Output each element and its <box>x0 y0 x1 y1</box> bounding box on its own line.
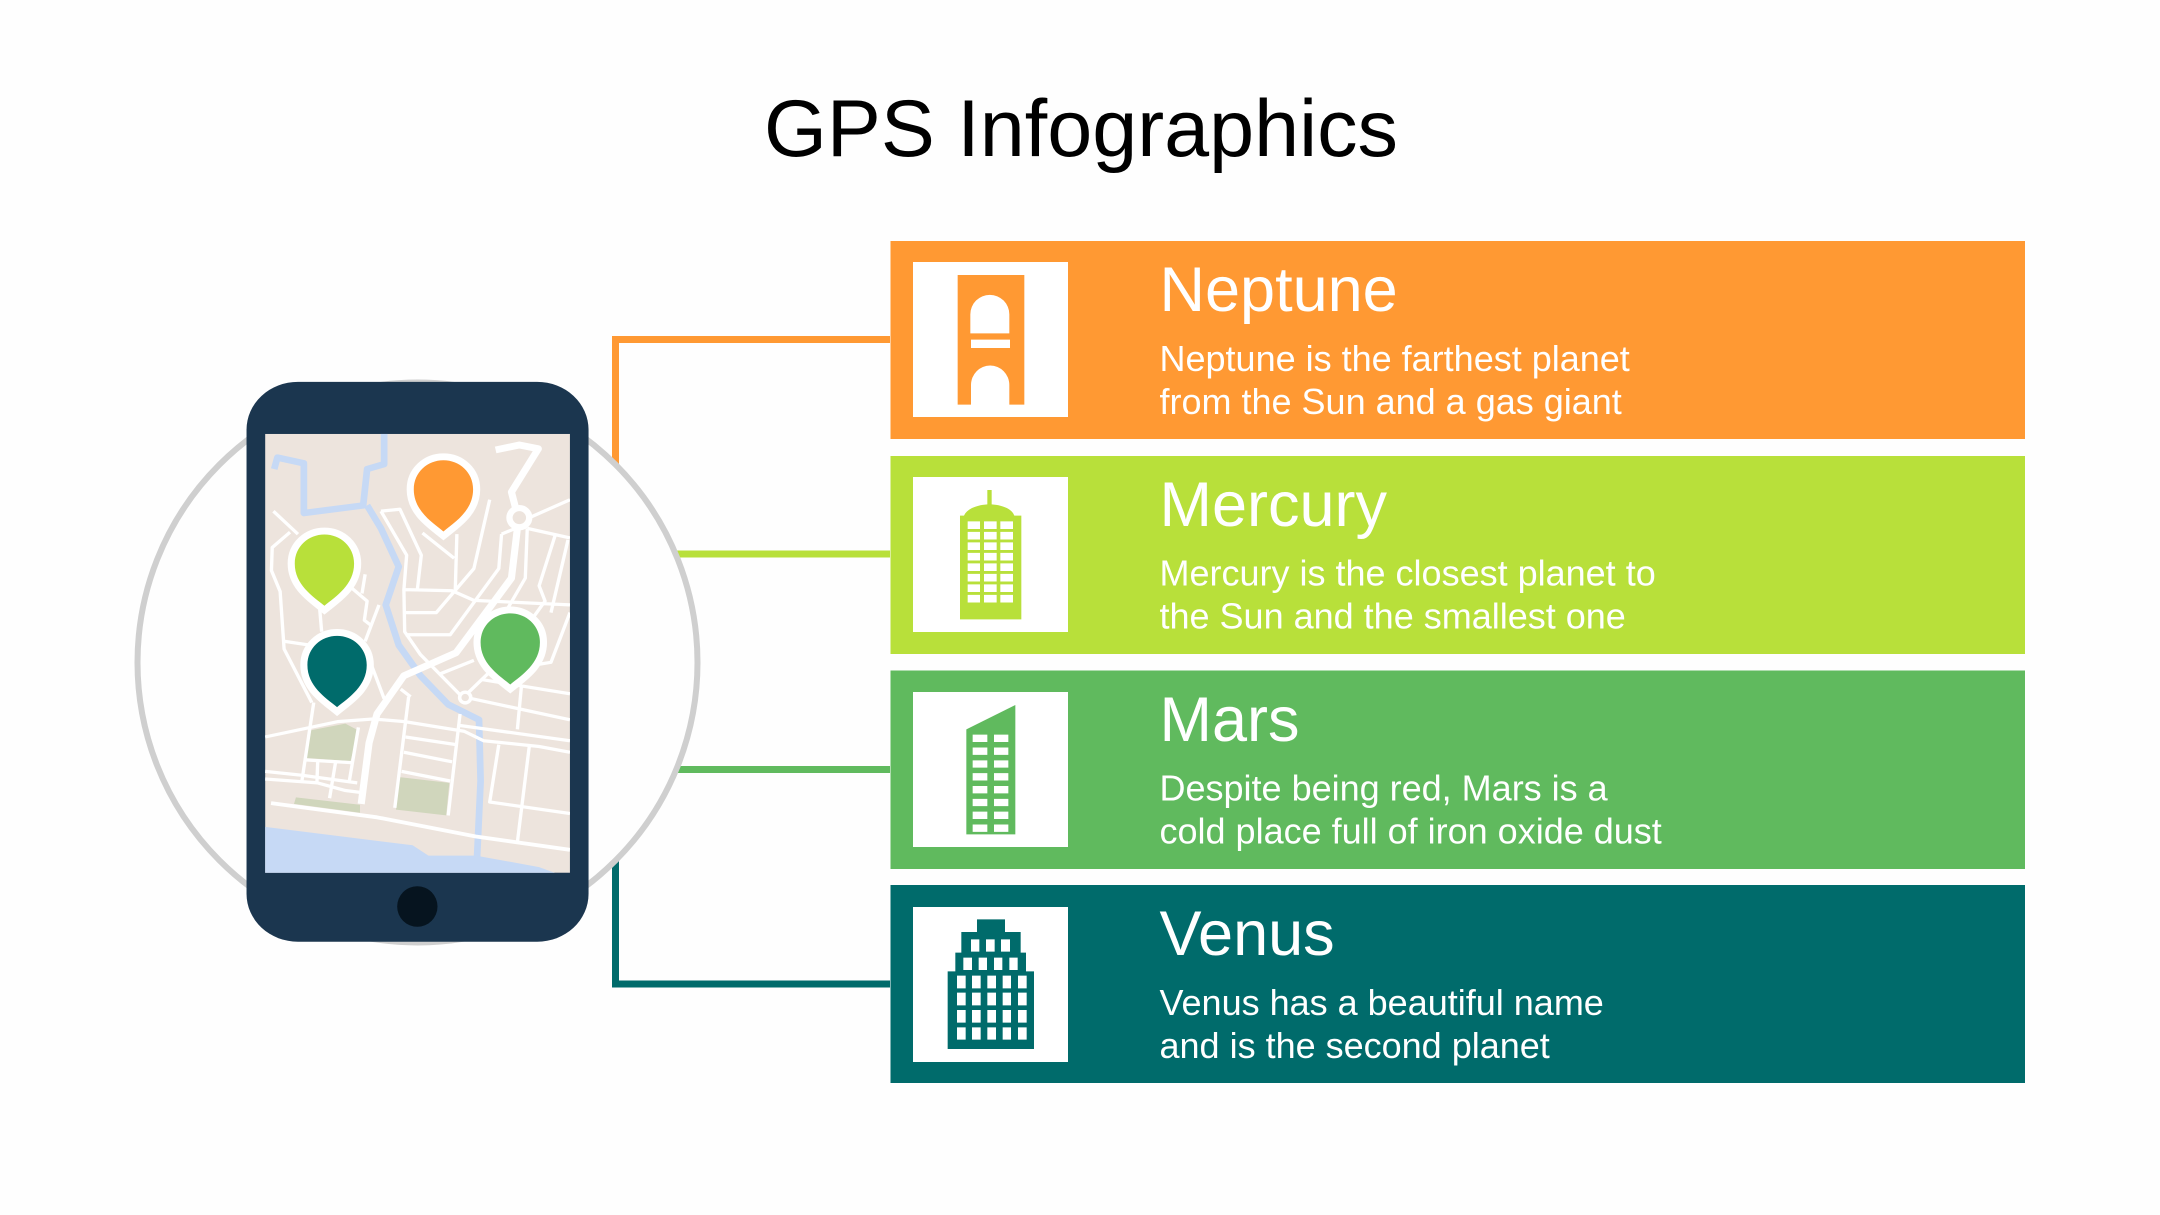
description: cold place full of iron oxide dust <box>1160 810 1662 852</box>
icon: domed tower <box>960 490 1021 619</box>
icon: arched tower <box>958 275 1024 405</box>
description: Mercury is the closest planet to <box>1160 552 1656 594</box>
panel: Mercury <box>890 456 2025 654</box>
connector: green <box>660 766 890 773</box>
phone with map <box>247 382 589 942</box>
pin: lime <box>295 535 354 606</box>
description: from the Sun and a gas giant <box>1160 381 1622 422</box>
description: Venus has a beautiful name <box>1160 982 1604 1023</box>
circle behind phone <box>138 382 698 942</box>
icon: stepped tower <box>948 919 1034 1049</box>
pin: green <box>481 613 540 685</box>
heading: Venus <box>1160 899 1335 969</box>
connector: teal <box>616 850 890 984</box>
heading: Mercury <box>1160 470 1388 540</box>
panel: Mars <box>890 670 2025 869</box>
panel: Venus <box>890 885 2025 1083</box>
connector: lime <box>660 550 890 558</box>
panel: Neptune <box>890 241 2025 439</box>
map screen <box>265 434 570 873</box>
description: the Sun and the smallest one <box>1160 596 1626 636</box>
connector: orange <box>616 340 890 480</box>
heading: Neptune <box>1160 255 1398 325</box>
pin: orange <box>414 460 473 531</box>
description: Neptune is the farthest planet <box>1160 338 1630 379</box>
pin: teal <box>307 636 367 707</box>
description: and is the second planet <box>1160 1025 1550 1066</box>
home button <box>397 886 438 927</box>
phone body <box>247 382 589 942</box>
description: Despite being red, Mars is a <box>1160 768 1608 808</box>
heading: Mars <box>1160 685 1300 755</box>
title: GPS Infographics <box>764 84 1398 174</box>
icon: slanted tower <box>966 705 1015 834</box>
